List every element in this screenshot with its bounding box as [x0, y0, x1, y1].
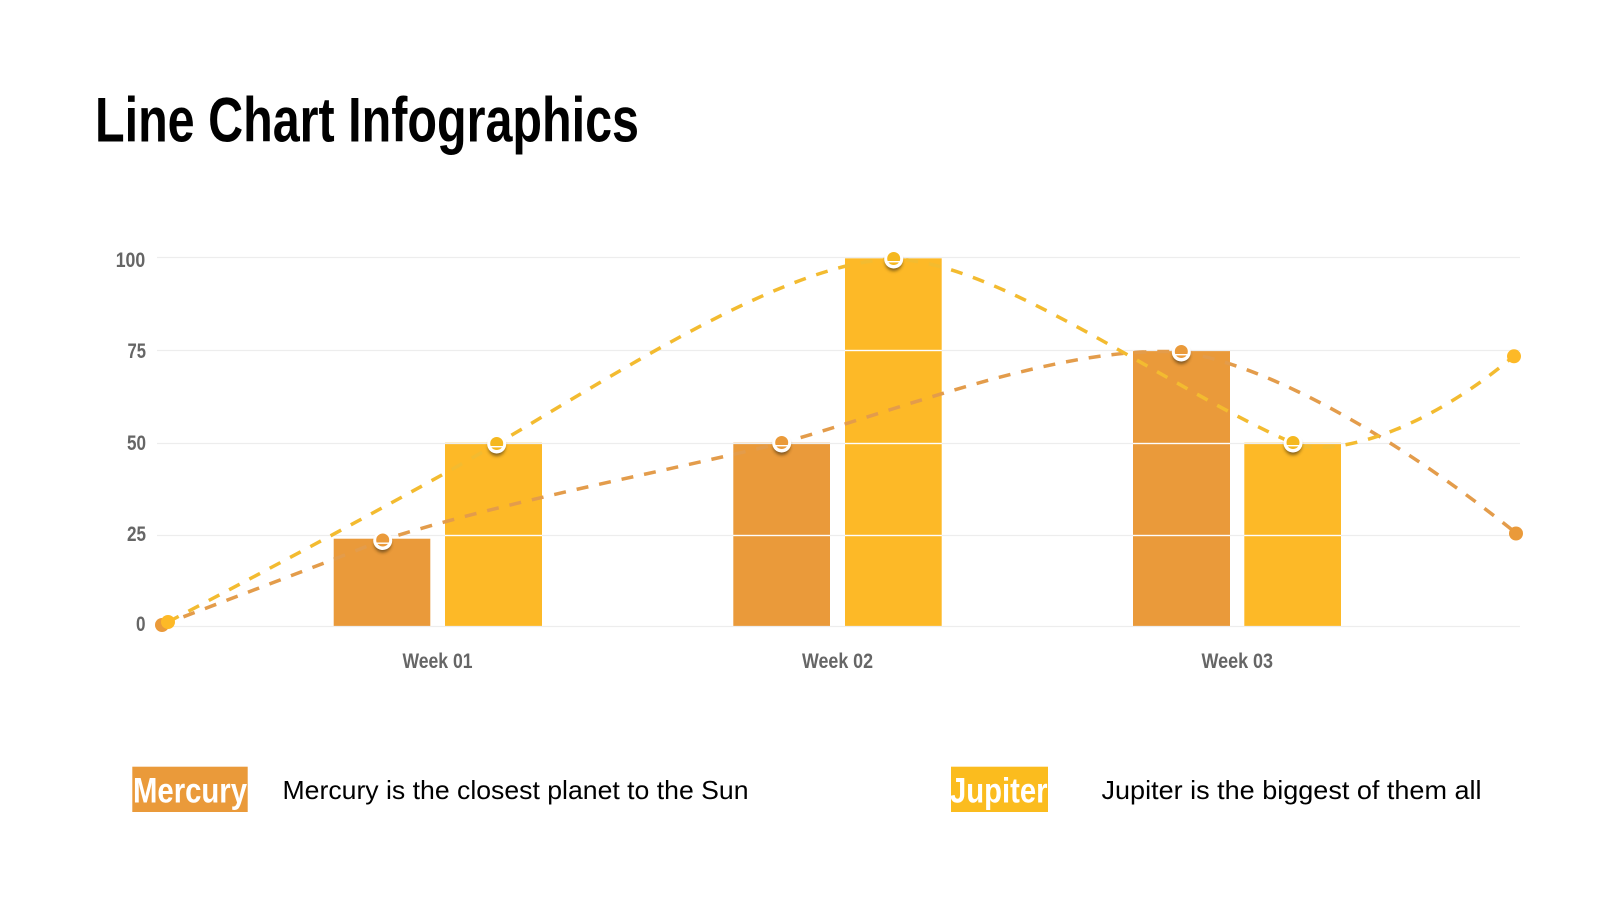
title: Line Chart Infographics: [95, 86, 639, 156]
y axis labels: 50: [127, 432, 146, 455]
Mercury badge: Mercury: [133, 772, 247, 810]
x axis labels: Week 03: [1202, 650, 1273, 673]
y axis labels: 75: [128, 340, 146, 363]
ring markers: Jupiter: [487, 250, 1302, 456]
line: Jupiter: [168, 259, 1514, 622]
legend: Mercury: [132, 767, 749, 812]
x axis labels: [402, 650, 1273, 673]
bars: Mercury: [334, 351, 1230, 626]
Jupiter badge: Jupiter: [950, 772, 1048, 810]
chart: combined bars and lines: [116, 249, 1523, 673]
line: Mercury: [162, 351, 1516, 625]
y axis labels: 0: [136, 613, 146, 636]
legend: Jupiter: [950, 767, 1482, 812]
y axis labels: 100: [116, 249, 145, 272]
Jupiter description: Jupiter is the biggest of them all: [1102, 775, 1482, 805]
ring markers: Mercury: [373, 342, 1191, 552]
bars: Jupiter: [445, 258, 1341, 626]
Mercury description: Mercury is the closest planet to the Sun: [282, 775, 748, 805]
x axis labels: Week 01: [402, 650, 473, 673]
y axis labels: 25: [127, 523, 146, 546]
start and end markers: [155, 349, 1523, 632]
x axis labels: Week 02: [802, 650, 873, 673]
y axis labels: [116, 249, 146, 636]
